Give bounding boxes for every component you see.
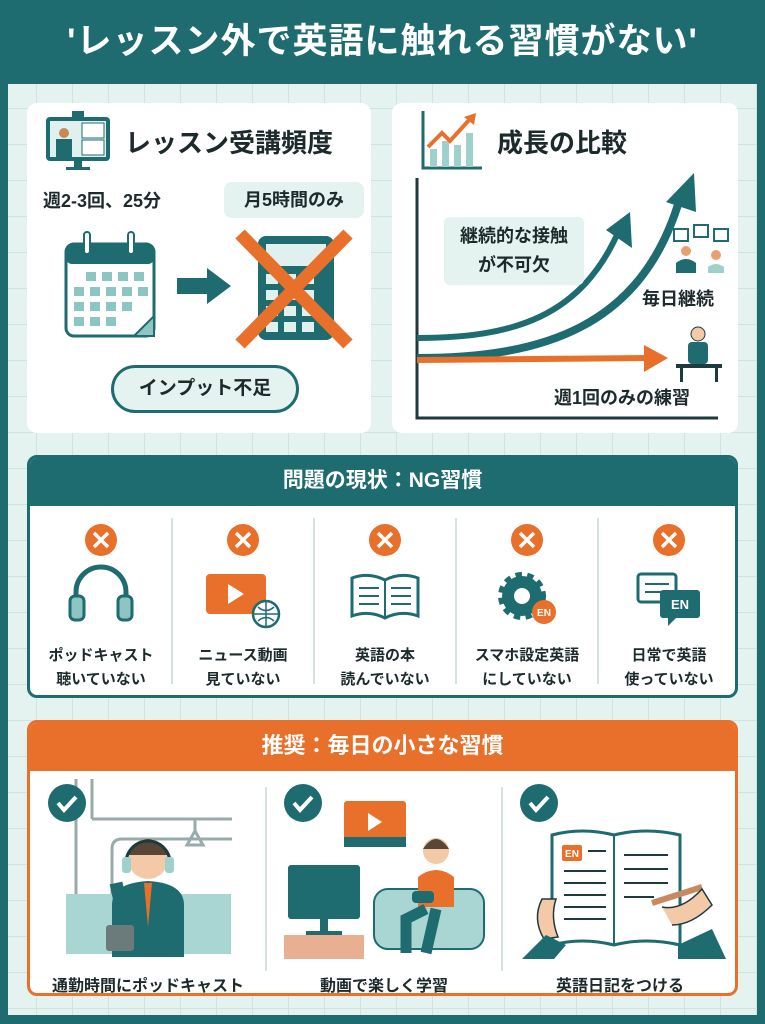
item: news video: 見ていない — [205, 671, 280, 688]
callout: continuous contact: が不可欠 — [478, 255, 550, 275]
item: podcast — [48, 524, 154, 688]
item: English diary — [520, 784, 726, 995]
title — [0, 0, 765, 84]
panel: lesson frequency — [27, 103, 371, 433]
callout: input shortage — [111, 365, 299, 413]
item: phone settings — [475, 524, 579, 688]
title: 'レッスン外で英語に触れる習慣がない' — [67, 22, 698, 61]
panel: recommended habits — [27, 720, 738, 996]
heading: 推奨：毎日の小さな習慣 — [261, 733, 504, 758]
icon: growth chart — [422, 111, 482, 170]
item: English book — [340, 524, 430, 688]
item: video learning — [284, 784, 485, 995]
label: daily: 毎日継続 — [642, 289, 714, 309]
text: frequency: 週2-3回、25分 — [43, 191, 161, 211]
arrow — [177, 268, 231, 304]
tag: 5 hours: 月5時間のみ — [244, 190, 344, 210]
heading: レッスン受講頻度 — [125, 128, 333, 158]
item: video learning: 動画で楽しく学習 — [320, 978, 448, 995]
label: weekly: 週1回のみの練習 — [554, 388, 690, 408]
icon: people chatting — [673, 224, 729, 273]
item: daily use — [624, 524, 714, 688]
item: English book: 英語の本 — [355, 647, 415, 664]
item: news video: ニュース動画 — [198, 647, 288, 664]
heading — [30, 458, 735, 506]
item: English book: 読んでいない — [340, 671, 430, 688]
item: phone settings: にしていない — [482, 671, 572, 688]
item: podcast: ポッドキャスト — [48, 647, 154, 664]
callout: continuous contact — [444, 217, 584, 285]
item: news video — [198, 524, 288, 688]
icon: video call monitor — [46, 111, 110, 170]
heading: 成長の比較 — [497, 128, 627, 158]
item: commute podcast: 通勤時間にポッドキャスト — [52, 978, 244, 995]
item: daily use: 日常で英語 — [631, 647, 706, 664]
item: commute podcast — [48, 779, 244, 995]
chart: growth lines — [416, 173, 722, 420]
item: daily use: EN — [671, 597, 689, 612]
icon: calendar — [64, 231, 156, 338]
tag: 5 hours — [224, 182, 364, 218]
item: phone settings: スマホ設定英語 — [475, 647, 579, 664]
panel: NG habits — [27, 455, 738, 698]
icon: crossed calculator — [236, 230, 352, 348]
item: phone settings: EN — [537, 608, 551, 619]
person at desk — [691, 327, 705, 341]
item: daily use: 使っていない — [624, 671, 714, 688]
item: English diary: EN — [565, 849, 579, 860]
panel: growth comparison — [392, 103, 738, 433]
item: English diary: 英語日記をつける — [556, 978, 684, 995]
callout: continuous contact: 継続的な接触 — [460, 226, 568, 246]
heading: 問題の現状：NG習慣 — [283, 469, 482, 492]
item: podcast: 聴いていない — [56, 671, 146, 688]
heading — [30, 723, 735, 771]
callout: input shortage: インプット不足 — [139, 378, 271, 399]
